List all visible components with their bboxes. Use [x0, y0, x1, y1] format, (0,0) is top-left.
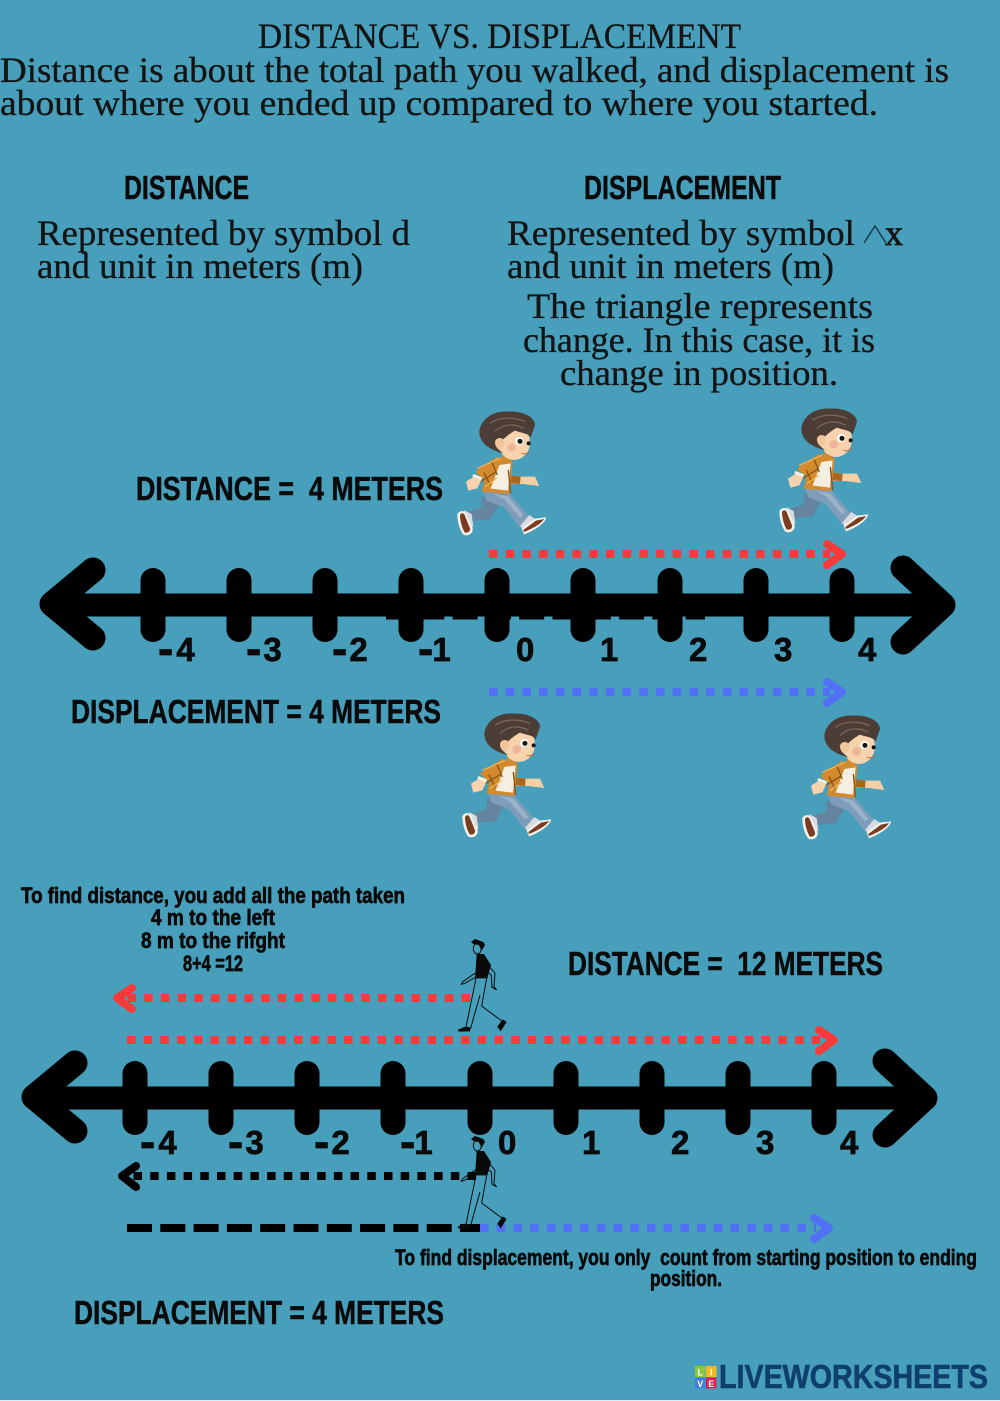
label: distance 12 meters: DISTANCE = 12 METERS — [568, 945, 883, 982]
icon: boy running end (distance) — [779, 408, 868, 532]
displacement description — [507, 213, 903, 286]
red arrow: distance path — [489, 544, 842, 565]
number line 1 — [52, 568, 943, 642]
distance description: and unit in meters (m) — [37, 246, 363, 286]
number labels 2 — [140, 1116, 859, 1168]
number labels 1: 0 — [516, 631, 534, 668]
note: finding distance: 4 m to the left — [151, 905, 276, 930]
label: displacement 4 meters: DISPLACEMENT = 4 METERS — [71, 693, 441, 730]
red arrow: left path — [117, 988, 470, 1009]
number labels 1: 2 — [349, 631, 368, 668]
intro text — [0, 50, 949, 123]
distance description: Represented by symbol d — [37, 213, 410, 253]
number labels 1 — [158, 622, 877, 674]
number labels 1: - — [246, 622, 261, 674]
logo: liveworksheets: I — [710, 1368, 712, 1378]
note: finding displacement: position. — [650, 1266, 722, 1291]
triangle explanation: The triangle represents — [527, 286, 873, 326]
triangle explanation: change in position. — [560, 353, 838, 393]
heading: displacement: DISPLACEMENT — [584, 169, 781, 206]
logo: liveworksheets: V — [697, 1379, 703, 1389]
intro text: Distance is about the total path you walked, and displacement is — [0, 50, 949, 90]
number labels 1: 1 — [600, 631, 618, 668]
heading: distance: DISTANCE — [124, 169, 249, 206]
number labels 2: 2 — [331, 1124, 350, 1161]
number labels 2: - — [314, 1116, 329, 1168]
black arrow: left path — [122, 1166, 476, 1187]
displacement description: x — [885, 213, 903, 253]
number labels 1: 3 — [774, 631, 792, 668]
number labels 1: 3 — [263, 631, 282, 668]
number labels 2: - — [400, 1116, 415, 1168]
logo: liveworksheets: E — [708, 1379, 714, 1389]
icon: boy running start (distance) — [457, 411, 546, 535]
black dashed segment — [127, 1224, 480, 1232]
number labels 2: - — [228, 1116, 243, 1168]
note: finding distance: 8+4 =12 — [183, 951, 243, 976]
number labels 2: 1 — [582, 1124, 600, 1161]
number labels 1: - — [158, 622, 173, 674]
icon: boy running end (displacement) — [802, 715, 891, 839]
number labels 1: 4 — [858, 631, 877, 668]
displacement description: Represented by symbol — [507, 213, 855, 253]
number labels 2: - — [140, 1116, 155, 1168]
intro text: about where you ended up compared to where you started. — [0, 83, 878, 123]
blue arrow: net displacement — [480, 1218, 829, 1239]
displacement description: and unit in meters (m) — [507, 246, 834, 286]
number line 2 — [34, 1061, 925, 1135]
number labels 2: 0 — [498, 1124, 516, 1161]
number labels 1: - — [332, 622, 347, 674]
icon: walking person bottom — [457, 1136, 507, 1229]
number labels 1: 1 — [432, 631, 451, 668]
icon: boy running start (displacement) — [462, 713, 551, 837]
distance description — [37, 213, 410, 286]
triangle explanation: change. In this case, it is — [523, 320, 875, 360]
label: displacement 4 meters (bottom): DISPLACEMENT = 4 METERS — [74, 1294, 444, 1331]
number labels 2: 3 — [245, 1124, 264, 1161]
note: finding displacement — [395, 1245, 977, 1291]
number labels 2: 4 — [840, 1124, 859, 1161]
note: finding distance: 8 m to the rifght — [141, 928, 286, 953]
label: distance 4 meters: DISTANCE = 4 METERS — [136, 470, 443, 507]
logo: liveworksheets: L — [697, 1368, 703, 1378]
number labels 1: 2 — [689, 631, 707, 668]
number labels 2: 3 — [756, 1124, 774, 1161]
number labels 1: - — [418, 622, 433, 674]
red arrow: right path — [127, 1030, 834, 1051]
note: finding distance — [21, 883, 405, 976]
triangle explanation — [523, 286, 875, 393]
number labels 2: 1 — [414, 1124, 433, 1161]
note: finding distance: To find distance, you add all the path taken — [21, 883, 405, 908]
number labels 2: 4 — [158, 1124, 177, 1161]
icon: walking person top — [457, 939, 507, 1032]
number labels 2: 2 — [671, 1124, 689, 1161]
title: DISTANCE VS. DISPLACEMENT — [258, 16, 741, 56]
blue arrow: displacement — [489, 682, 842, 703]
number labels 1: 4 — [176, 631, 195, 668]
